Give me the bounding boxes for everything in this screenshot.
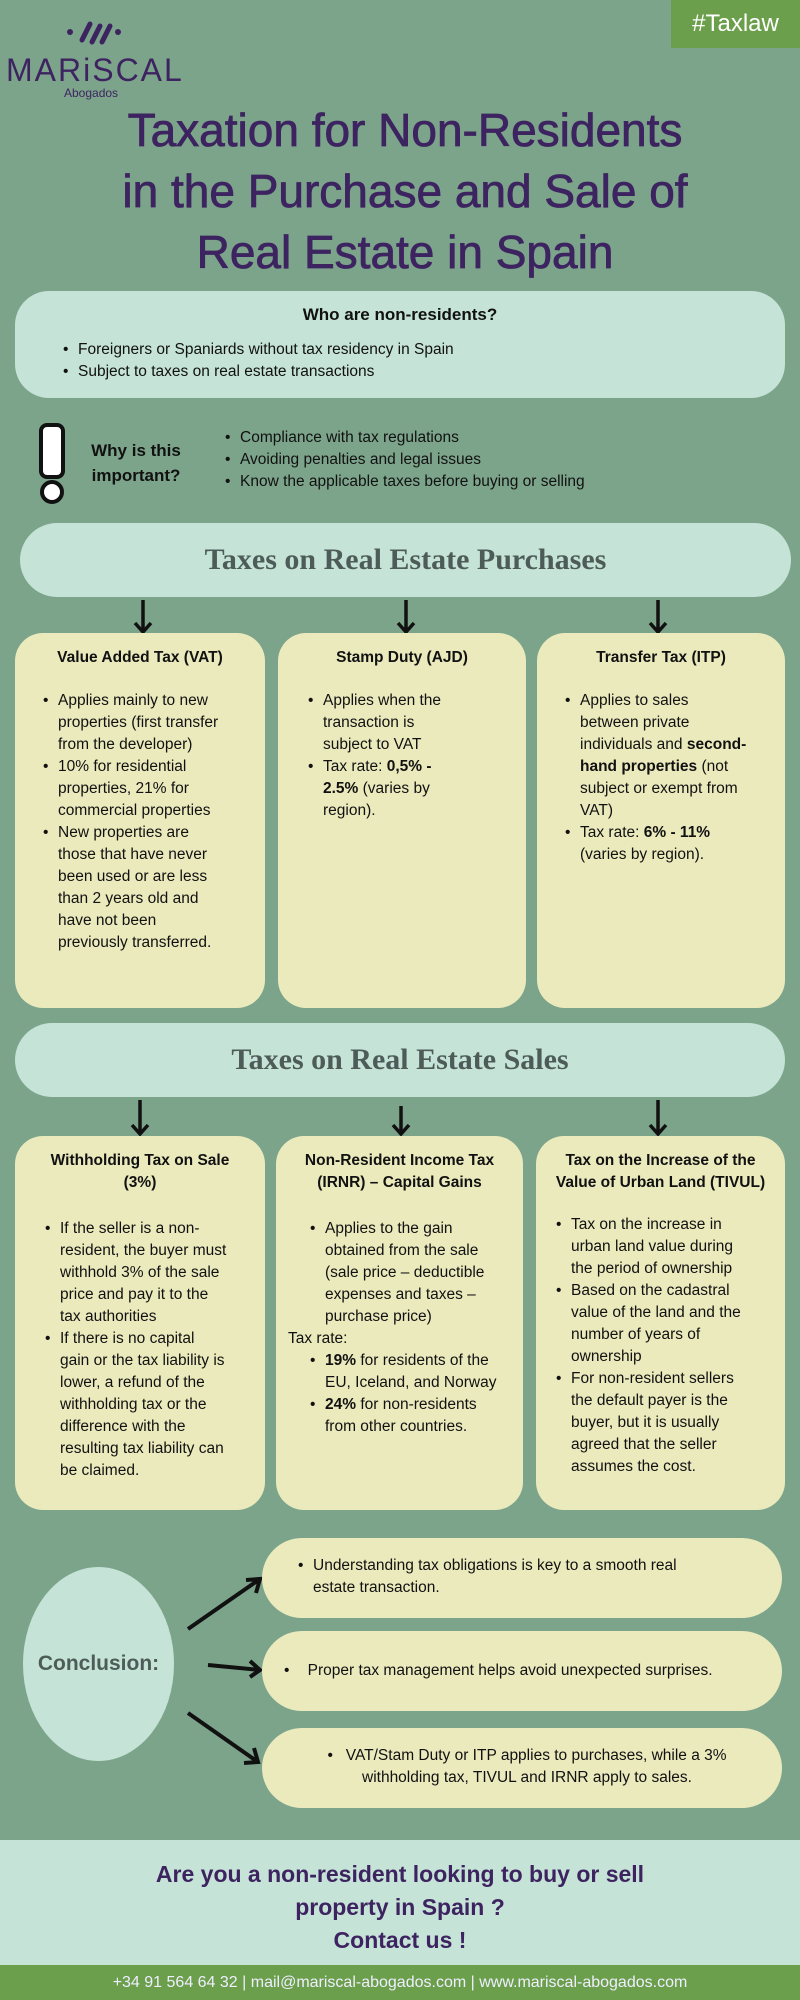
card: ITP: subject or exempt from xyxy=(580,780,738,797)
panel: who are non-residents: Who are non-residents? xyxy=(303,305,497,324)
card: IRNR: obtained from the sale xyxy=(325,1242,478,1259)
card: stamp duty: 2.5% (varies by xyxy=(323,780,430,797)
card: TIVUL: buyer, but it is usually xyxy=(571,1414,719,1431)
card: IRNR: EU, Iceland, and Norway xyxy=(325,1374,496,1391)
arrows: purchases xyxy=(134,600,668,633)
card: TIVUL: value of the land and the xyxy=(571,1304,741,1321)
card: VAT: have not been xyxy=(58,912,156,929)
call to action band: property in Spain ? xyxy=(295,1894,505,1920)
card: IRNR: Non-Resident Income Tax xyxy=(305,1152,494,1169)
card: withholding: difference with the xyxy=(60,1418,186,1435)
card: stamp duty: Applies when the xyxy=(323,692,441,709)
card: VAT: properties (first transfer xyxy=(58,714,218,731)
call to action band xyxy=(0,1840,800,1965)
card: IRNR: 24% for non-residents xyxy=(325,1396,477,1413)
heading: sales xyxy=(15,1023,785,1097)
title: in the Purchase and Sale of xyxy=(122,165,688,217)
card: VAT: from the developer) xyxy=(58,736,192,753)
card: ITP: between private xyxy=(580,714,689,731)
card: ITP: hand properties (not xyxy=(580,758,728,775)
conclusion circle: Conclusion: xyxy=(38,1652,159,1675)
card: IRNR xyxy=(276,1136,523,1510)
card: VAT: properties, 21% for xyxy=(58,780,189,797)
card: TIVUL: the period of ownership xyxy=(571,1260,732,1277)
card: TIVUL: ownership xyxy=(571,1348,642,1365)
why important bullets: Avoiding penalties and legal issues xyxy=(240,451,481,468)
why important bullets: Compliance with tax regulations xyxy=(240,429,459,446)
card: IRNR: purchase price) xyxy=(325,1308,432,1325)
heading: purchases: Taxes on Real Estate Purchases xyxy=(205,543,606,576)
conclusion box 1: estate transaction. xyxy=(313,1579,440,1596)
card: TIVUL: agreed that the seller xyxy=(571,1436,717,1453)
arrows: sales xyxy=(130,1100,668,1136)
card: IRNR: expenses and taxes – xyxy=(325,1286,476,1303)
card: VAT: than 2 years old and xyxy=(58,890,198,907)
card: withholding: price and pay it to the xyxy=(60,1286,208,1303)
card: withholding: Withholding Tax on Sale xyxy=(51,1152,229,1169)
title: Real Estate in Spain xyxy=(197,226,613,278)
card: VAT: Value Added Tax (VAT) xyxy=(57,649,223,666)
icon: exclamation xyxy=(39,423,65,504)
card: TIVUL: Based on the cadastral xyxy=(571,1282,730,1299)
call to action band: Contact us ! xyxy=(334,1927,466,1953)
card: TIVUL xyxy=(536,1136,785,1510)
conclusion box 3: • VAT/Stam Duty or ITP applies to purchases, while a 3% xyxy=(327,1747,727,1764)
card: VAT xyxy=(15,633,265,1008)
card: IRNR: from other countries. xyxy=(325,1418,467,1435)
card: TIVUL: the default payer is the xyxy=(571,1392,728,1409)
card: stamp duty: Stamp Duty (AJD) xyxy=(336,649,468,666)
card: VAT: been used or are less xyxy=(58,868,207,885)
card: withholding: (3%) xyxy=(124,1174,156,1191)
tag: Taxlaw: #Taxlaw xyxy=(692,10,779,37)
logo xyxy=(6,22,184,100)
card: stamp duty xyxy=(278,633,526,1008)
card: withholding: If the seller is a non- xyxy=(60,1220,200,1237)
card: ITP: Applies to sales xyxy=(580,692,689,709)
card: stamp duty: region). xyxy=(323,802,376,819)
call to action band: Are you a non-resident looking to buy or sell xyxy=(156,1861,644,1887)
card: ITP: (varies by region). xyxy=(580,846,704,863)
card: ITP: individuals and second- xyxy=(580,736,746,753)
card: TIVUL: urban land value during xyxy=(571,1238,733,1255)
conclusion box 3: withholding tax, TIVUL and IRNR apply to sales. xyxy=(362,1769,692,1786)
card: stamp duty: subject to VAT xyxy=(323,736,422,753)
card: IRNR: (sale price – deductible xyxy=(325,1264,484,1281)
panel: who are non-residents xyxy=(15,291,785,398)
card: withholding: tax authorities xyxy=(60,1308,156,1325)
card: withholding: be claimed. xyxy=(60,1462,139,1479)
card: withholding: resulting tax liability can xyxy=(60,1440,224,1457)
why important label: Why is this xyxy=(91,441,181,460)
card: TIVUL: number of years of xyxy=(571,1326,700,1343)
conclusion box 3 xyxy=(262,1728,782,1808)
logo: MARiSCAL xyxy=(6,52,184,88)
panel: who are non-residents: Foreigners or Spaniards without tax residency in Spain xyxy=(78,341,454,358)
panel: who are non-residents: Subject to taxes on real estate transactions xyxy=(78,363,374,380)
card: ITP: VAT) xyxy=(580,802,613,819)
card: stamp duty: transaction is xyxy=(323,714,414,731)
card: VAT: Applies mainly to new xyxy=(58,692,208,709)
card: VAT: previously transferred. xyxy=(58,934,211,951)
card: withholding: gain or the tax liability is xyxy=(60,1352,225,1369)
card: VAT: commercial properties xyxy=(58,802,210,819)
why important label xyxy=(91,441,181,485)
conclusion box 1 xyxy=(262,1538,782,1618)
card: TIVUL: Value of Urban Land (TIVUL) xyxy=(556,1174,765,1191)
footer contact xyxy=(0,1965,800,2000)
card: withholding: withholding tax or the xyxy=(60,1396,206,1413)
logo: Abogados xyxy=(64,86,118,100)
conclusion box 1: Understanding tax obligations is key to a smooth real xyxy=(313,1557,677,1574)
card: VAT: 10% for residential xyxy=(58,758,186,775)
why important bullets: Know the applicable taxes before buying or selling xyxy=(240,473,585,490)
why important bullets xyxy=(226,429,585,490)
card: IRNR: Tax rate: xyxy=(288,1330,347,1347)
card: TIVUL: Tax on the increase in xyxy=(571,1216,722,1233)
card: VAT: those that have never xyxy=(58,846,207,863)
conclusion box 2: Proper tax management helps avoid unexpected surprises. xyxy=(308,1662,713,1679)
title: Taxation for Non-Residents xyxy=(128,104,682,156)
card: IRNR: Applies to the gain xyxy=(325,1220,453,1237)
card: VAT: New properties are xyxy=(58,824,189,841)
conclusion circle xyxy=(23,1567,174,1761)
card: IRNR: 19% for residents of the xyxy=(325,1352,489,1369)
card: withholding xyxy=(15,1136,265,1510)
card: ITP xyxy=(537,633,785,1008)
heading: purchases xyxy=(20,523,791,597)
conclusion box 2 xyxy=(262,1631,782,1711)
arrows: conclusion xyxy=(186,1576,262,1765)
card: withholding: withhold 3% of the sale xyxy=(60,1264,219,1281)
card: withholding: If there is no capital xyxy=(60,1330,194,1347)
card: withholding: resident, the buyer must xyxy=(60,1242,226,1259)
heading: sales: Taxes on Real Estate Sales xyxy=(231,1043,569,1076)
why important label: important? xyxy=(92,466,180,485)
footer contact: +34 91 564 64 32 | mail@mariscal-abogados.com | www.mariscal-abogados.com xyxy=(113,1974,687,1991)
card: ITP: Tax rate: 6% - 11% xyxy=(580,824,710,841)
card: stamp duty: Tax rate: 0,5% - xyxy=(323,758,432,775)
card: IRNR: (IRNR) – Capital Gains xyxy=(317,1174,482,1191)
card: ITP: Transfer Tax (ITP) xyxy=(596,649,726,666)
card: withholding: lower, a refund of the xyxy=(60,1374,205,1391)
tag: Taxlaw xyxy=(671,0,800,48)
card: TIVUL: For non-resident sellers xyxy=(571,1370,734,1387)
card: TIVUL: assumes the cost. xyxy=(571,1458,696,1475)
title xyxy=(122,104,688,278)
card: TIVUL: Tax on the Increase of the xyxy=(565,1152,756,1169)
